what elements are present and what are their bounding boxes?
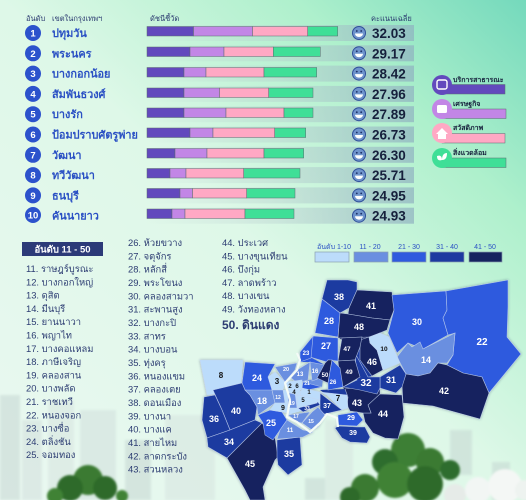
map district numbers: 31 [386, 375, 396, 385]
map district numbers: 8 [219, 371, 224, 380]
row 6: ป้อมปราบศัตรูพ่าย [52, 128, 138, 142]
rank list column 1: 16. พญาไท [26, 330, 72, 340]
row 7: 7 [30, 150, 36, 161]
health: สวัสดิภาพ [453, 124, 484, 132]
map legend [315, 243, 502, 262]
rank list column 2: 41. สายไหม [128, 437, 177, 448]
row 9: ธนบุรี [52, 189, 79, 203]
rank list column 2: 30. คลองสามวา [128, 290, 194, 301]
map district numbers: 14 [421, 355, 431, 365]
rank list column 2: 32. บางกะปิ [128, 317, 176, 328]
row 2: พระนคร [52, 48, 92, 60]
rank list column 1 [26, 263, 93, 460]
map district numbers: 30 [412, 317, 422, 327]
rank list column 2: 33. สาทร [128, 330, 166, 341]
row 8: ทวีวัฒนา [52, 169, 95, 182]
map district numbers: 24 [252, 373, 262, 383]
map district numbers: 35 [284, 449, 294, 459]
map district numbers: 41 [366, 301, 376, 311]
map district numbers: 3 [275, 377, 280, 386]
rank list column 2: 38. ดอนเมือง [128, 397, 181, 408]
map district numbers: 23 [303, 351, 310, 357]
map legend: 11 - 20 [359, 244, 381, 251]
map district numbers: 4 [292, 390, 296, 396]
map district numbers: 46 [367, 357, 377, 367]
rank list column 2: 27. จตุจักร [128, 250, 171, 262]
rank list column 2: 39. บางนา [128, 410, 171, 421]
row 6: 26.73 [372, 128, 406, 142]
map district numbers: 21 [304, 381, 310, 387]
map legend: อันดับ 1-10 [317, 243, 351, 251]
map district numbers: 47 [343, 346, 351, 353]
row 10: คันนายาว [52, 210, 99, 222]
public services: บริการสาธารณะ [453, 76, 504, 84]
rank list column 2: 42. ลาดกระบัง [128, 450, 187, 461]
map district numbers: 39 [349, 430, 357, 437]
map district numbers: 19 [289, 401, 295, 407]
rank list column 3: 48. บางเขน [222, 290, 270, 301]
map legend: 21 - 30 [398, 244, 420, 251]
map district numbers: 1 [307, 390, 311, 396]
map district numbers: 42 [439, 386, 449, 396]
map district numbers: 29 [347, 415, 355, 422]
rank list column 1: 12. บางกอกใหญ่ [26, 276, 93, 287]
row 3: 3 [30, 69, 36, 80]
rank list column 1: 15. ยานนาวา [26, 316, 81, 327]
row 5 [25, 106, 414, 122]
column headers: ดัชนีชี้วัด [150, 13, 179, 23]
rank list column 3: 47. ลาดพร้าว [222, 277, 276, 288]
row 7 [25, 147, 414, 163]
map district numbers: 7 [336, 394, 341, 403]
map district numbers: 32 [360, 378, 372, 389]
row 10: 10 [28, 210, 38, 222]
map district numbers: 5 [301, 398, 305, 404]
map district numbers: 11 [287, 428, 294, 434]
rank list column 1: 24. ตลิ่งชัน [26, 435, 71, 447]
column headers [26, 13, 412, 23]
map district numbers: 33 [304, 406, 310, 412]
row 7: 26.30 [372, 148, 406, 163]
map district numbers: 27 [321, 341, 331, 351]
map district numbers: 9 [281, 405, 285, 412]
row 4 [25, 86, 414, 102]
rank list column 2: 36. หนองแขม [128, 370, 185, 381]
row 6 [25, 126, 414, 142]
map district numbers: 37 [323, 403, 331, 410]
row 10 [25, 207, 414, 224]
map district numbers: 49 [345, 369, 353, 376]
rank list column 2: 29. พระโขนง [128, 277, 182, 288]
row 8: 25.71 [372, 168, 406, 183]
row 5: 27.89 [372, 107, 406, 122]
row 9 [25, 187, 414, 203]
map legend: 31 - 40 [436, 244, 458, 251]
map district numbers [209, 292, 488, 469]
map legend: 41 - 50 [474, 244, 496, 251]
map district numbers: 15 [308, 419, 314, 425]
row 8: 8 [30, 171, 36, 182]
row 7: วัฒนา [52, 150, 82, 162]
river [285, 353, 338, 432]
rank list column 1: 13. ดุสิต [26, 290, 60, 302]
column headers: คะแนนเฉลี่ย [371, 13, 412, 23]
rank list column 1: 20. บางพลัด [26, 383, 75, 394]
column headers: เขตในกรุงเทพฯ [52, 14, 102, 23]
map district numbers: 40 [231, 406, 241, 416]
map district numbers: 36 [209, 414, 219, 424]
trees [47, 433, 526, 500]
map district numbers: 28 [324, 316, 334, 326]
category legend [432, 75, 506, 168]
row 9: 9 [30, 191, 36, 202]
city skyline background [0, 395, 510, 500]
map district numbers: 22 [476, 337, 488, 348]
rank list column 3: 50. ดินแดง [222, 318, 280, 332]
row 3: 28.42 [372, 67, 406, 82]
row 2 [25, 45, 414, 61]
map district numbers: 18 [257, 396, 267, 406]
row 6: 6 [30, 130, 36, 141]
rank list column 2: 40. บางแค [128, 424, 172, 435]
map district numbers: 2 [288, 384, 292, 390]
map district numbers: 12 [275, 395, 281, 401]
row 10: 24.93 [372, 209, 406, 224]
rank list column 2: 31. สะพานสูง [128, 304, 183, 316]
row 1: 1 [30, 28, 36, 40]
rank list column 1: 17. บางคอแหลม [26, 343, 93, 354]
rank list column 2: 35. ทุ่งครุ [128, 357, 166, 369]
rank list column 3: 46. บึงกุ่ม [222, 264, 260, 276]
map district numbers: 45 [245, 459, 255, 469]
map district numbers: 48 [354, 322, 364, 332]
rank rows [25, 25, 414, 224]
row 3: บางกอกน้อย [52, 68, 110, 81]
row 1 [25, 25, 414, 41]
row 3 [25, 66, 414, 82]
map district numbers: 6 [295, 384, 299, 390]
rank list column 3: 45. บางขุนเทียน [222, 250, 288, 262]
economy: เศรษฐกิจ [453, 100, 480, 109]
row 2: 29.17 [372, 46, 406, 61]
rank list column 3 [222, 237, 288, 332]
row 5: 5 [30, 110, 36, 121]
rank list column 1: 21. ราชเทวี [26, 396, 73, 407]
row 1: 32.03 [372, 26, 406, 41]
map district numbers: 25 [266, 418, 276, 428]
rank list column 1: 18. ภาษีเจริญ [26, 356, 81, 367]
environment: สิ่งแวดล้อม [452, 147, 487, 157]
rank list column 2: 26. ห้วยขวาง [128, 237, 182, 248]
rank list column 1: 23. บางซื่อ [26, 422, 69, 434]
map district numbers: 44 [378, 409, 388, 419]
rank list column 2: 37. คลองเตย [128, 384, 181, 395]
rank list column 3: 44. ประเวศ [222, 237, 268, 248]
row 5: บางรัก [52, 109, 83, 121]
map district numbers: 43 [352, 398, 362, 408]
rank list column 2: 43. สวนหลวง [128, 464, 183, 475]
map district numbers: 50 [322, 373, 329, 379]
rank list heading [22, 242, 103, 256]
rank list column 1: 14. มีนบุรี [26, 303, 65, 315]
row 2: 2 [30, 49, 36, 60]
map district numbers: 34 [224, 437, 234, 447]
map of Bangkok districts [200, 280, 521, 500]
map district numbers: 16 [312, 369, 319, 375]
rank list column 1: 19. คลองสาน [26, 369, 82, 380]
rank list column 2: 28. หลักสี่ [128, 263, 167, 275]
rank list column 1: 25. จอมทอง [26, 449, 75, 460]
map district numbers: 13 [297, 372, 304, 378]
row 9: 24.95 [372, 188, 406, 203]
map district numbers: 17 [293, 414, 299, 420]
row 4: 4 [30, 89, 36, 100]
row 4: สัมพันธวงศ์ [52, 88, 107, 101]
column headers: อันดับ [26, 14, 46, 23]
rank list column 1: 11. ราษฎร์บูรณะ [26, 263, 93, 275]
map district numbers: 20 [283, 367, 289, 373]
rank list column 2 [128, 237, 194, 475]
rank list column 2: 34. บางบอน [128, 344, 178, 355]
row 1: ปทุมวัน [52, 27, 87, 41]
rank list column 3: 49. วังทองหลาง [222, 304, 286, 314]
map district numbers: 38 [334, 292, 344, 302]
rank list column 1: 22. หนองจอก [26, 409, 81, 420]
map district numbers: 26 [330, 380, 337, 386]
map district numbers: 10 [380, 346, 388, 353]
rank list heading: อันดับ 11 - 50 [34, 244, 91, 256]
row 4: 27.96 [372, 87, 406, 102]
row 8 [25, 167, 414, 183]
